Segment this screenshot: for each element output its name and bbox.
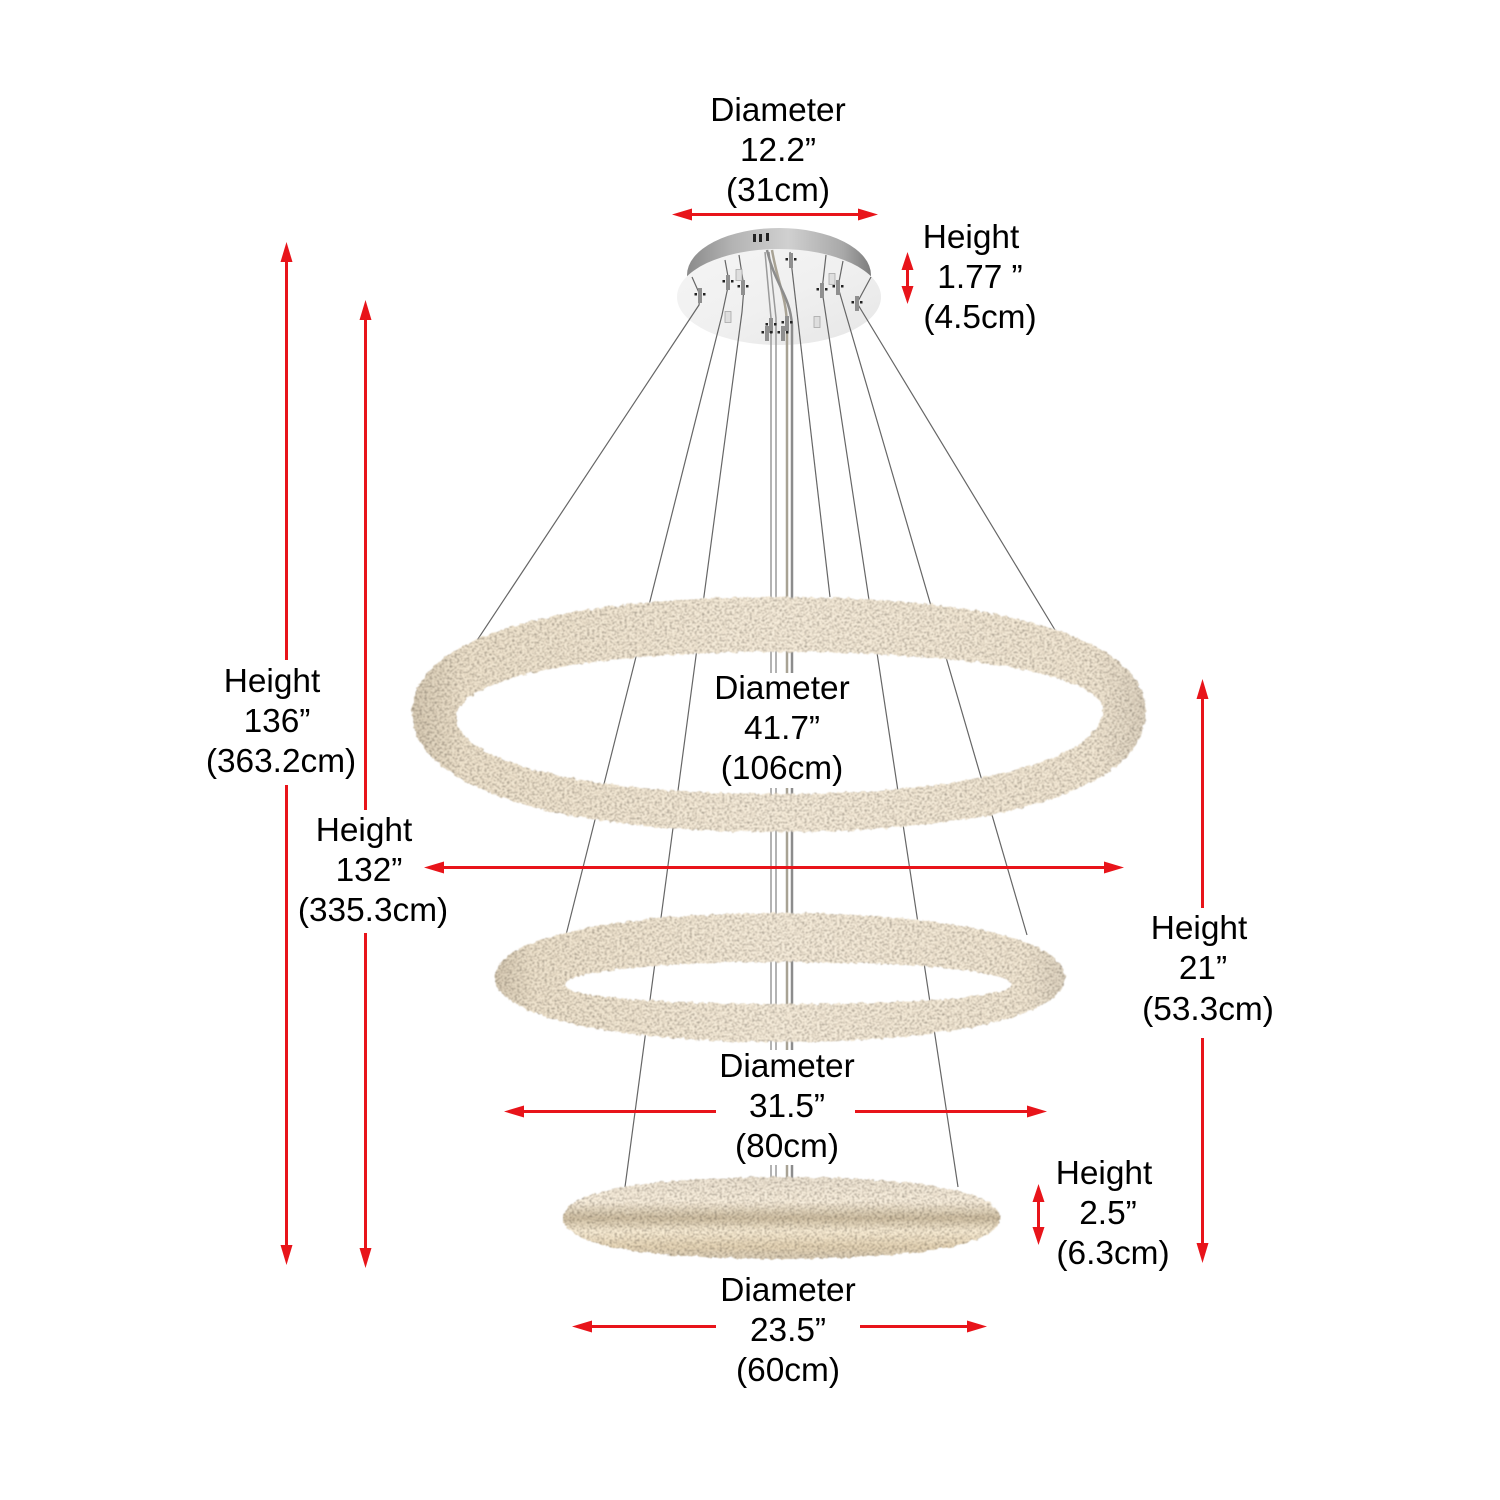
arrow: total height 136 <box>280 242 292 1265</box>
label: canopy height: Height <box>923 219 1020 256</box>
label: top diameter <box>710 92 846 209</box>
label: total height 136 <box>206 663 356 780</box>
label: top ring diameter: 41.7” <box>744 710 820 747</box>
arrow: top ring diameter <box>424 862 1124 874</box>
label: canopy height <box>923 219 1037 336</box>
label: bottom ring height: 2.5” <box>1079 1195 1137 1232</box>
label: top diameter: 12.2” <box>740 132 816 169</box>
suspension wires <box>472 252 1055 1187</box>
label: middle ring diameter: Diameter <box>719 1048 855 1085</box>
label: height 21 <box>1142 910 1274 1028</box>
label: bottom ring height <box>1056 1155 1170 1272</box>
bottom ring <box>563 1177 1000 1259</box>
label: total height 136: 136” <box>244 703 310 740</box>
label: top ring diameter: Diameter <box>714 670 850 707</box>
label: height 21: (53.3cm) <box>1142 991 1274 1028</box>
label: bottom ring diameter <box>720 1272 856 1389</box>
label: total height 136: (363.2cm) <box>206 743 356 780</box>
arrow: canopy height <box>902 252 914 304</box>
label: height 132 <box>298 812 448 929</box>
canopy side band <box>687 228 871 322</box>
label: height 132: (335.3cm) <box>298 892 448 929</box>
canopy fittings <box>694 253 862 341</box>
label: bottom ring height: (6.3cm) <box>1056 1235 1170 1272</box>
arrow: bottom ring height <box>1032 1184 1044 1245</box>
label: top ring diameter <box>712 670 854 788</box>
label: height 132: Height <box>316 812 413 849</box>
canopy vents <box>753 233 769 242</box>
label: height 132: 132” <box>336 852 402 889</box>
arrow: middle ring diameter <box>504 1106 1047 1118</box>
middle ring <box>495 913 1065 1042</box>
arrow: height 21 <box>1196 679 1208 1263</box>
label: bottom ring diameter: (60cm) <box>736 1352 840 1389</box>
arrow: top diameter <box>672 208 878 220</box>
label: bottom ring diameter: Diameter <box>720 1272 856 1309</box>
label: canopy height: (4.5cm) <box>923 299 1037 336</box>
label: middle ring diameter <box>716 1048 858 1165</box>
label: middle ring diameter: 31.5” <box>749 1088 825 1125</box>
label: bottom ring diameter: 23.5” <box>750 1312 826 1349</box>
ceiling canopy <box>677 228 881 345</box>
label: middle ring diameter: (80cm) <box>735 1128 839 1165</box>
label: height 21: 21” <box>1179 950 1227 987</box>
arrow: height 132 <box>360 300 372 1268</box>
label: top diameter: Diameter <box>710 92 846 129</box>
label: total height 136: Height <box>224 663 321 700</box>
label: top diameter: (31cm) <box>726 172 830 209</box>
center cables <box>765 250 792 1180</box>
label: canopy height: 1.77 ” <box>937 259 1023 296</box>
label: bottom ring height: Height <box>1056 1155 1153 1192</box>
label: top ring diameter: (106cm) <box>721 750 843 787</box>
label: height 21: Height <box>1151 910 1248 947</box>
canopy mirrored base <box>677 249 881 345</box>
arrow: bottom ring diameter <box>572 1320 987 1332</box>
top ring <box>412 597 1146 832</box>
